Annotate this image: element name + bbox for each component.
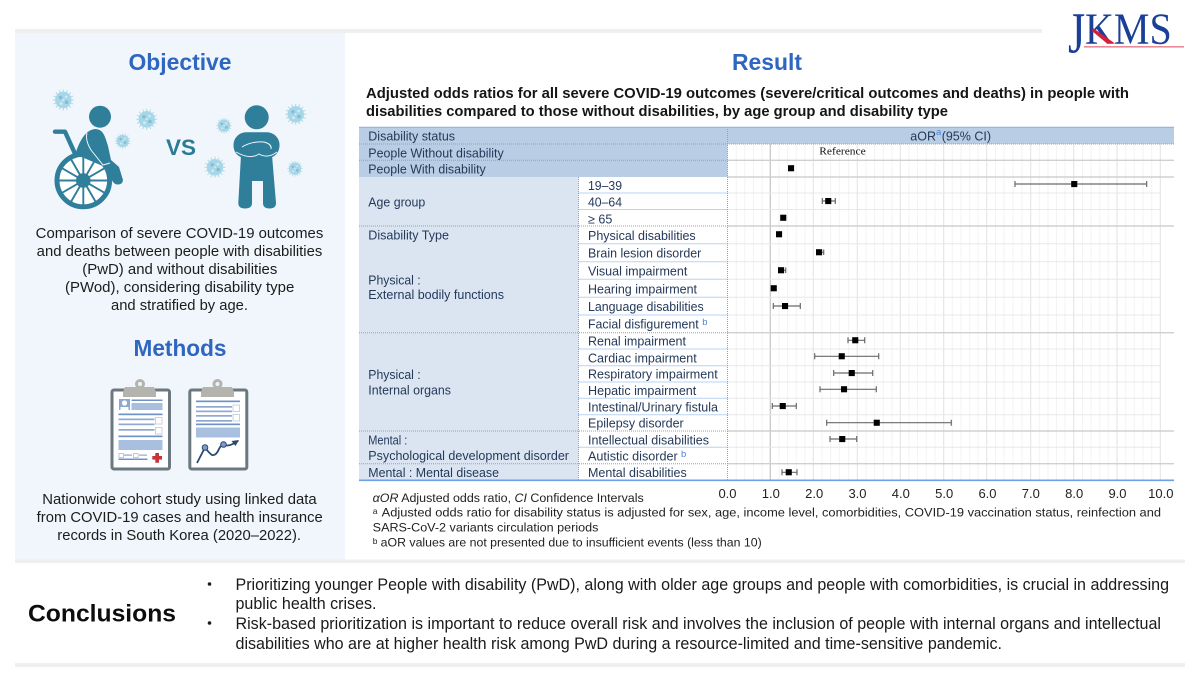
- text: objective description: (PWod), considering disability type: [65, 280, 294, 296]
- marker: hepatic impairment: [820, 386, 876, 392]
- column header: aOR (95% CI): a: [936, 127, 942, 138]
- text: methods description: [37, 492, 323, 544]
- logo: JKMS: KMS: [1085, 4, 1172, 54]
- x axis labels: 8.0: [1065, 486, 1083, 501]
- logo: JKMS: J: [1068, 2, 1085, 66]
- icon: clipboard with trend chart: [190, 379, 247, 469]
- table sub-group labels: Intestinal/Urinary fistula: [588, 400, 719, 414]
- x axis labels: 0.0: [718, 486, 737, 501]
- table sub-group labels: Cardiac impairment: [588, 351, 697, 365]
- text: objective description: [36, 226, 323, 314]
- chart title: [366, 85, 1129, 120]
- text: objective description: (PwD) and without disabilities: [82, 262, 277, 278]
- text: methods description: from COVID-19 cases and health insurance: [37, 510, 323, 526]
- icon: viruses around wheelchair user: [53, 90, 157, 149]
- rule above conclusions: [15, 560, 1185, 563]
- top rule: [15, 29, 1042, 33]
- heading: Conclusions: Conclusions: [28, 601, 176, 628]
- footnotes: Adjusted odds ratio for disability status is adjusted for sex, age, income level, comorbidities, COVID-19 vaccination status, reinfection and: [382, 506, 1161, 520]
- icon: standing person with crossed arms: [234, 105, 280, 208]
- table row labels: Psychological development disorder: [368, 449, 570, 463]
- footnotes: aOR values are not presented due to insufficient events (less than 10): [381, 536, 762, 550]
- marker: mental disabilities: [782, 469, 797, 475]
- footnotes: αOR Adjusted odds ratio, CI Confidence Intervals: [373, 491, 644, 505]
- footnotes: SARS-CoV-2 variants circulation periods: [373, 521, 598, 535]
- table dotted rules: [359, 127, 1174, 480]
- table and forest plot: [359, 127, 1174, 501]
- footnotes: a: [373, 506, 378, 516]
- marker: language disabilities: [773, 303, 800, 309]
- marker: cardiac impairment: [815, 353, 879, 359]
- heading: Objective: Objective: [128, 49, 232, 75]
- conclusion bullets: disabilities who are at higher health risk among PwD during a resource-limited and time-sensitive pandemic.: [236, 635, 1002, 653]
- marker: age 19-39: [1015, 181, 1147, 187]
- table sub-group labels: [588, 179, 719, 480]
- marker: epilepsy disorder: [827, 420, 951, 426]
- conclusion bullets: public health crises.: [236, 595, 376, 613]
- table row labels: Mental : Mental disease: [368, 466, 499, 480]
- marker: intellectual disabilities: [830, 436, 857, 442]
- marker: respiratory impairment: [834, 370, 873, 376]
- table row labels: Physical :: [368, 368, 421, 382]
- marker: physical disabilities: [776, 232, 782, 237]
- text: objective description: Comparison of severe COVID-19 outcomes: [36, 226, 323, 242]
- icon: person in wheelchair: [55, 106, 123, 207]
- marker: intestinal/urinary fistula: [772, 403, 796, 409]
- marker: age 40-64: [822, 198, 835, 204]
- x axis labels: 9.0: [1108, 486, 1127, 501]
- text: objective description: and stratified by age.: [111, 298, 248, 314]
- table sub-group labels: Autistic disorder: [588, 450, 678, 464]
- table sub-group labels: Mental disabilities: [588, 466, 687, 480]
- rule below conclusions: [15, 663, 1185, 667]
- table row labels: Internal organs: [368, 383, 451, 397]
- x axis labels: 4.0: [892, 486, 910, 501]
- table row labels: Disability status: [368, 130, 455, 144]
- panel: objective and methods: [15, 33, 345, 560]
- text: objective description: and deaths between people with disabilities: [37, 244, 322, 260]
- conclusion bullets: [208, 576, 1169, 653]
- table row labels: People With disability: [368, 163, 486, 177]
- heading: Result: Result: [732, 49, 802, 75]
- column header: aOR (95% CI): (95% CI): [942, 130, 991, 144]
- table sub-group labels: Renal impairment: [588, 335, 686, 349]
- column header: aOR (95% CI): aOR: [910, 130, 936, 144]
- x axis labels: 6.0: [978, 486, 997, 501]
- table sub-group labels: ≥ 65: [588, 212, 612, 226]
- marker: visual impairment: [778, 268, 786, 273]
- table background fills: [359, 127, 1174, 480]
- table sub-group labels: Physical disabilities: [588, 229, 696, 243]
- x axis labels: 2.0: [805, 486, 823, 501]
- text: methods description: records in South Korea (2020–2022).: [57, 528, 301, 544]
- table sub-group labels: Hepatic impairment: [588, 384, 697, 398]
- footnotes: [373, 491, 1161, 550]
- table row labels: External bodily functions: [368, 288, 504, 302]
- table sub-group labels: Brain lesion disorder: [588, 247, 702, 261]
- table row labels: Physical :: [368, 273, 421, 287]
- footnotes: b: [373, 536, 378, 546]
- table sub-group labels: 19–39: [588, 179, 622, 193]
- x axis labels: 5.0: [935, 486, 953, 501]
- x axis labels: [718, 486, 1173, 501]
- heading: Methods: Methods: [134, 335, 226, 361]
- table sub-group labels: Hearing impairment: [588, 282, 697, 296]
- chart title: Adjusted odds ratios for all severe COVID-19 outcomes (severe/critical outcomes and deaths) in people with: [366, 85, 1129, 102]
- marker: brain lesion disorder: [816, 250, 824, 255]
- reference label: Reference: [819, 145, 866, 157]
- table sub-group labels: Epilepsy disorder: [588, 417, 684, 431]
- conclusions section: [28, 576, 1169, 653]
- table sub-group labels: Facial disfigurement: [588, 318, 699, 332]
- marker: hearing impairment: [771, 286, 776, 291]
- marker: age 65 and over: [780, 215, 786, 220]
- table sub-group labels: 40–64: [588, 196, 622, 210]
- logo: JKMS: [1068, 2, 1184, 66]
- column header: aOR (95% CI): [910, 127, 991, 144]
- forest plot markers: [771, 166, 1147, 475]
- table sub-group labels: b: [681, 449, 686, 460]
- chart title: disabilities compared to those without disabilities, by age group and disability type: [366, 103, 948, 120]
- icon: clipboard with patient record: [112, 379, 170, 469]
- forest plot grid: [728, 144, 1174, 480]
- marker: with disability: [788, 166, 794, 171]
- conclusion bullets: Prioritizing younger People with disability (PwD), along with older age groups and people with comorbidities, is crucial in addressing: [236, 576, 1169, 594]
- table row labels: People Without disability: [368, 146, 504, 160]
- table row labels: [368, 130, 570, 480]
- x axis labels: 3.0: [848, 486, 867, 501]
- x axis labels: 1.0: [762, 486, 780, 501]
- table sub-group labels: Visual impairment: [588, 265, 688, 279]
- label: vs: VS: [166, 135, 196, 160]
- marker: renal impairment: [848, 337, 865, 343]
- table sub-group labels: b: [702, 317, 708, 328]
- conclusion bullets: Risk-based prioritization is important to reduce overall risk and involves the inclusion of people with internal organs and intellectual: [236, 615, 1161, 633]
- text: methods description: Nationwide cohort study using linked data: [42, 492, 317, 508]
- table row labels: Mental :: [368, 434, 407, 448]
- table row labels: Disability Type: [368, 228, 449, 242]
- x axis labels: 10.0: [1148, 486, 1173, 501]
- x axis labels: 7.0: [1022, 486, 1040, 501]
- table row labels: Age group: [368, 196, 425, 210]
- icon: viruses around standing person: [204, 104, 306, 178]
- table sub-group labels: Respiratory impairment: [588, 368, 718, 382]
- table sub-group labels: Language disabilities: [588, 300, 704, 314]
- table sub-group labels: Intellectual disabilities: [588, 433, 709, 447]
